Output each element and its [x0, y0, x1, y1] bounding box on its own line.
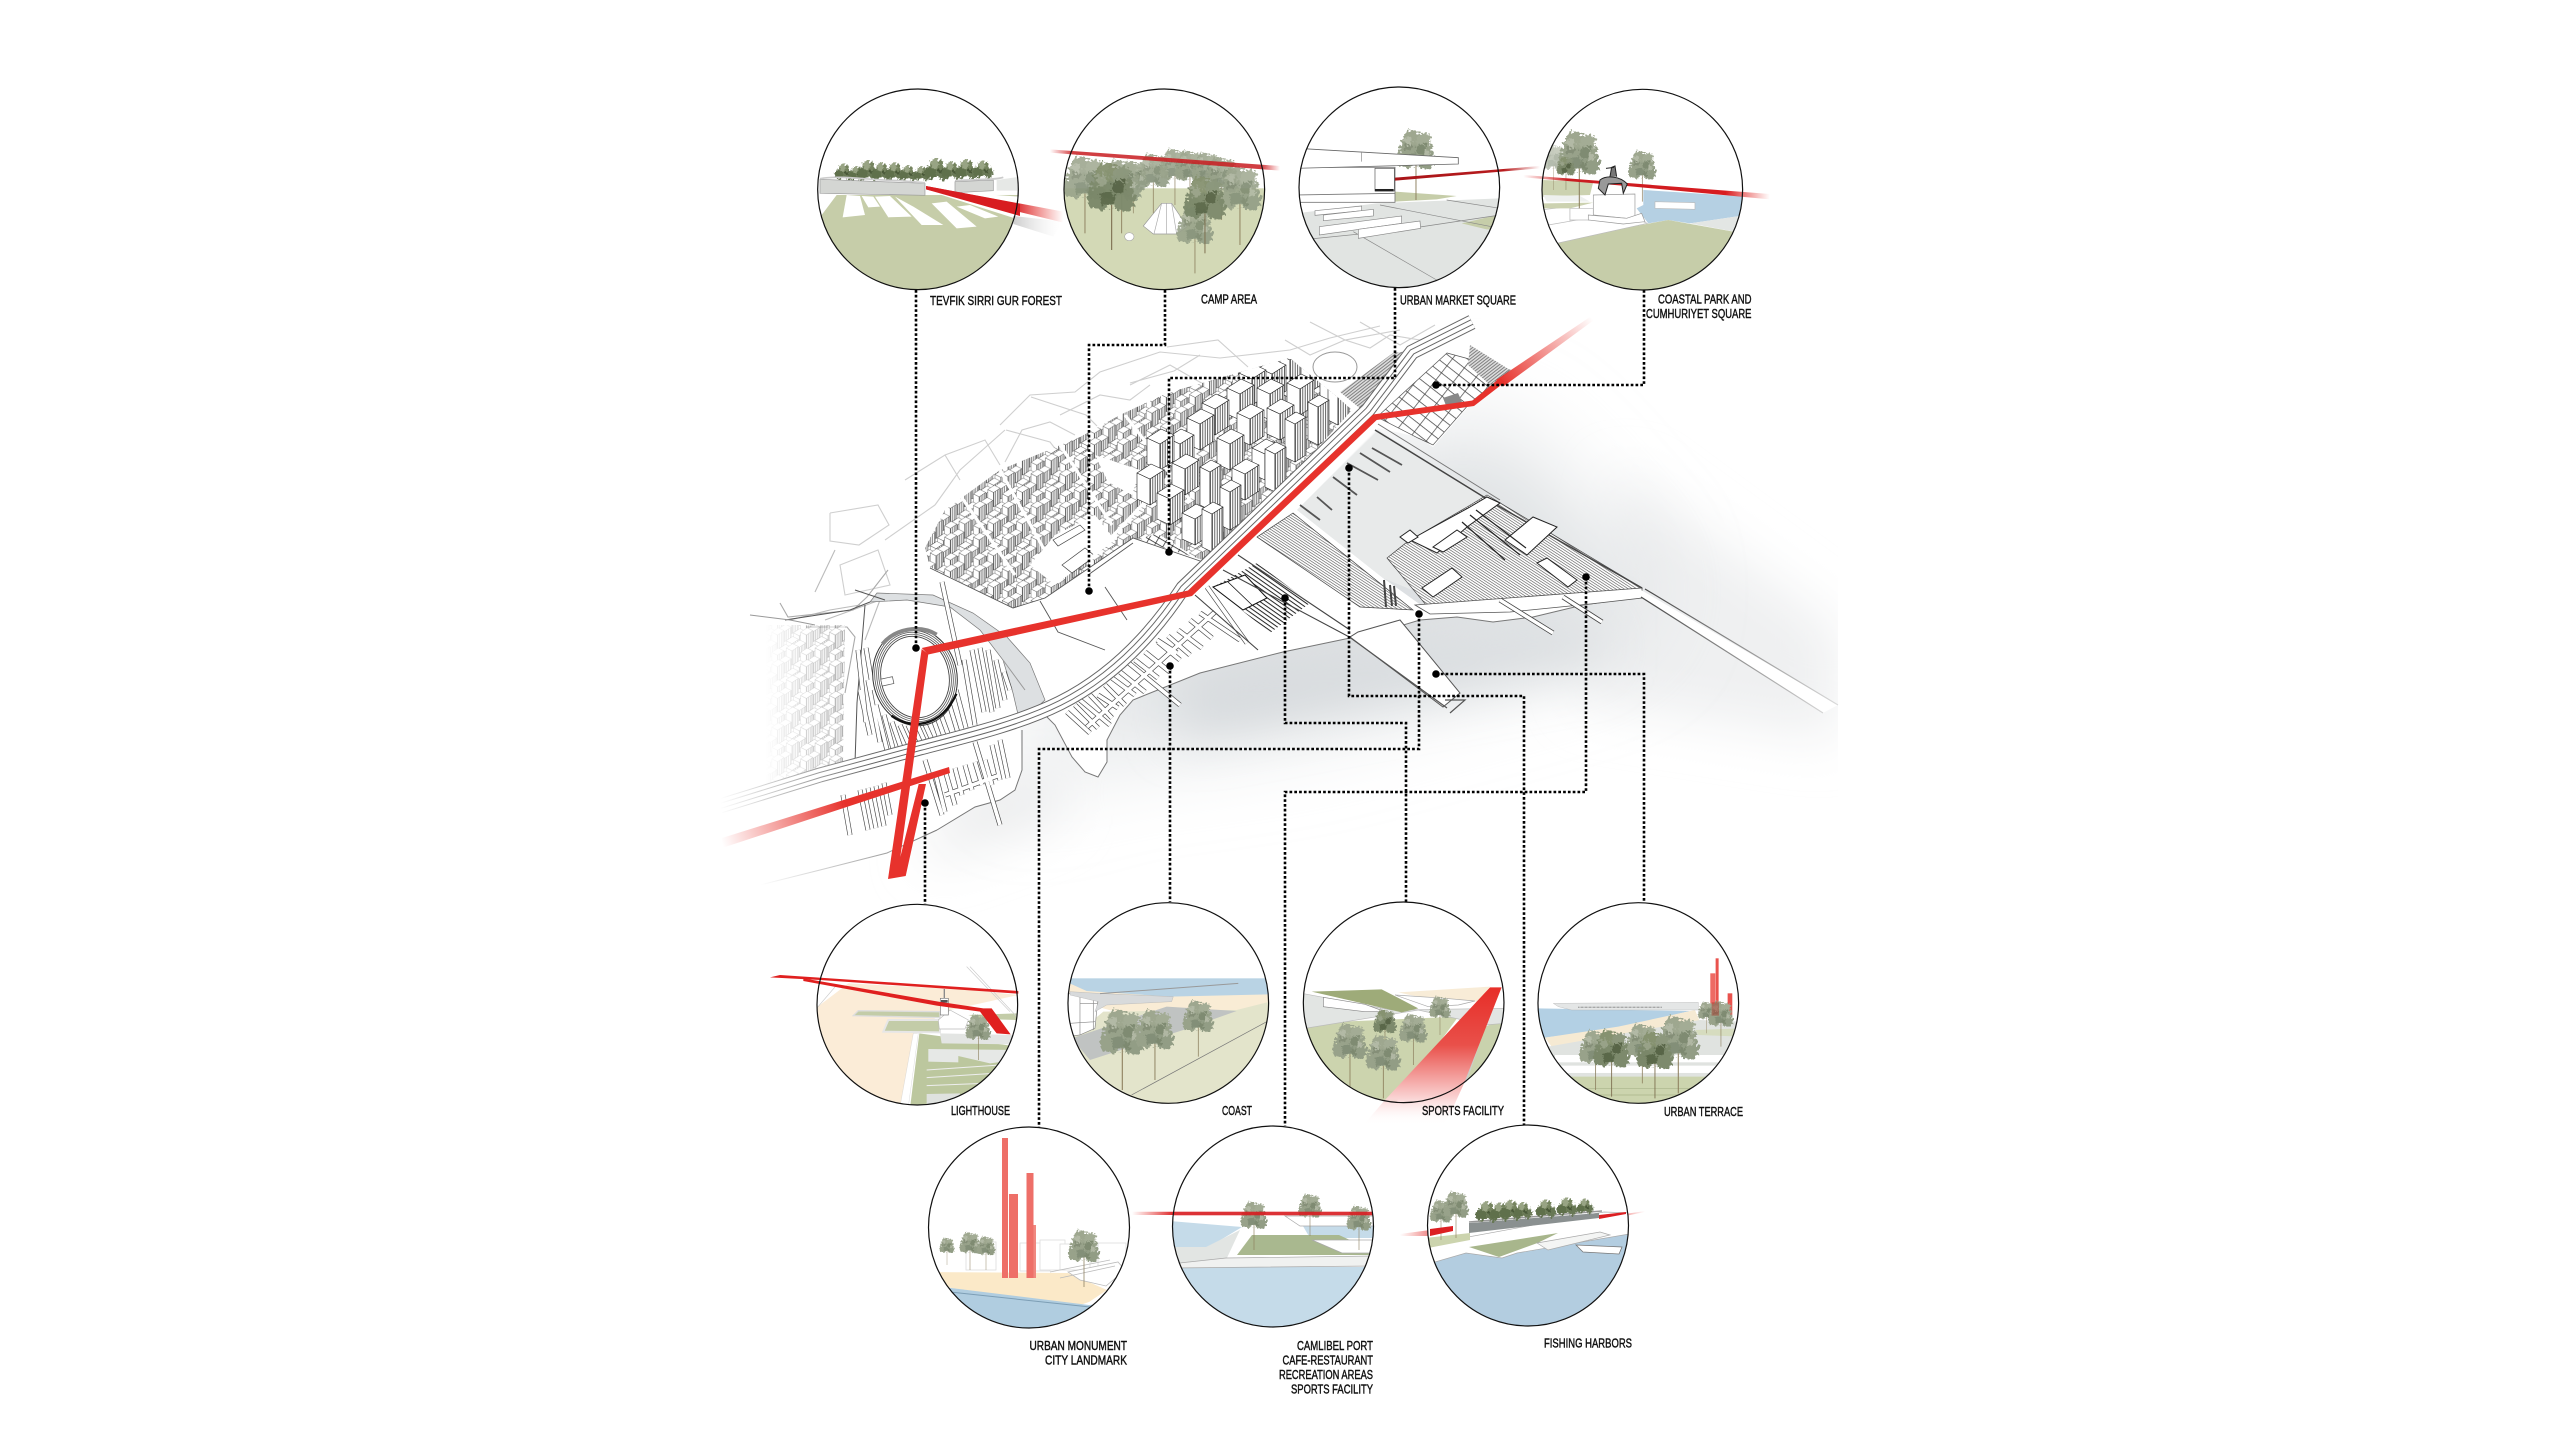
- label: [1279, 1339, 1373, 1396]
- label: CITY LANDMARK: [1045, 1354, 1128, 1368]
- V-shaped southern legs: [888, 649, 928, 879]
- city blocks: [920, 348, 1360, 615]
- vignette: Urban Terrace: [1535, 903, 1743, 1119]
- label: SPORTS FACILITY: [1422, 1104, 1504, 1118]
- map: axonometric coastal masterplan: [728, 315, 1838, 882]
- vignette: Camlibel Port: [1132, 1126, 1380, 1396]
- label: CAFE-RESTAURANT: [1282, 1354, 1373, 1368]
- vignette: Camp Area: [1050, 89, 1280, 307]
- faded western neighbourhood: [772, 625, 845, 781]
- vignette: Sports Facility: [1302, 902, 1507, 1125]
- stadium: [864, 620, 966, 734]
- vignette: Fishing Harbors: [1400, 1125, 1645, 1351]
- label: CAMLIBEL PORT: [1297, 1339, 1373, 1353]
- street edges: [930, 538, 1203, 650]
- monument pylons in plan: [1384, 580, 1396, 607]
- open park and low-rise blocks: [1095, 455, 1140, 495]
- land mass: [720, 318, 1640, 950]
- label: COASTAL PARK AND: [1658, 292, 1752, 306]
- streets through the blocks: [960, 414, 1236, 576]
- ghost context streets: [780, 322, 1450, 693]
- label: URBAN MONUMENT: [1030, 1339, 1127, 1353]
- north-east fade: [1496, 317, 1594, 386]
- label: [1030, 1339, 1128, 1368]
- vignette: Urban Monument: [925, 1127, 1135, 1368]
- hatched waterfront strip: [1257, 513, 1413, 610]
- shoreline: [760, 597, 1640, 885]
- label: LIGHTHOUSE: [951, 1104, 1010, 1118]
- label: URBAN TERRACE: [1664, 1105, 1743, 1119]
- sports hatched deck and building: [1195, 555, 1355, 650]
- sea gradient: [920, 420, 1838, 865]
- label: URBAN MARKET SQUARE: [1400, 294, 1516, 308]
- label: SPORTS FACILITY: [1291, 1382, 1373, 1396]
- coastal park grid: [1377, 345, 1510, 445]
- vignette: Tevfik Sirri Gur Forest: [813, 89, 1063, 308]
- vignette: Lighthouse: [770, 904, 1018, 1118]
- label: [1646, 292, 1752, 321]
- market hatched plaza and round plaza: [1313, 350, 1417, 410]
- label: RECREATION AREAS: [1279, 1368, 1373, 1382]
- terrace small piers: [1500, 597, 1602, 633]
- vignette: Coastal Park and Cumhuriyet Square: [1523, 89, 1770, 321]
- parking comb bars: [843, 582, 1247, 835]
- towers: [1137, 348, 1349, 552]
- red route line: [722, 317, 1594, 879]
- fading western branch: [722, 767, 950, 848]
- label: FISHING HARBORS: [1544, 1337, 1632, 1351]
- label: COAST: [1222, 1104, 1252, 1118]
- label: CUMHURIYET SQUARE: [1646, 307, 1752, 321]
- vignette: Urban Market Square: [1297, 87, 1540, 308]
- label: TEVFIK SIRRI GUR FOREST: [930, 294, 1062, 308]
- terrace promenade deck: [1375, 424, 1642, 633]
- long jetty: [1348, 620, 1465, 713]
- eastern breakwater: [1641, 589, 1838, 713]
- main route: [922, 378, 1505, 654]
- label: CAMP AREA: [1201, 293, 1258, 307]
- coastal road: [720, 322, 1472, 806]
- dotted leader lines with anchor dots: [912, 288, 1644, 1127]
- vignette: Coast: [1067, 903, 1270, 1118]
- horse statue: [1598, 166, 1627, 195]
- harbour finger piers: [1300, 448, 1402, 520]
- terrace buildings: [1400, 497, 1577, 597]
- inner harbour water: [1297, 430, 1500, 590]
- stadium site and river band: [750, 590, 1045, 766]
